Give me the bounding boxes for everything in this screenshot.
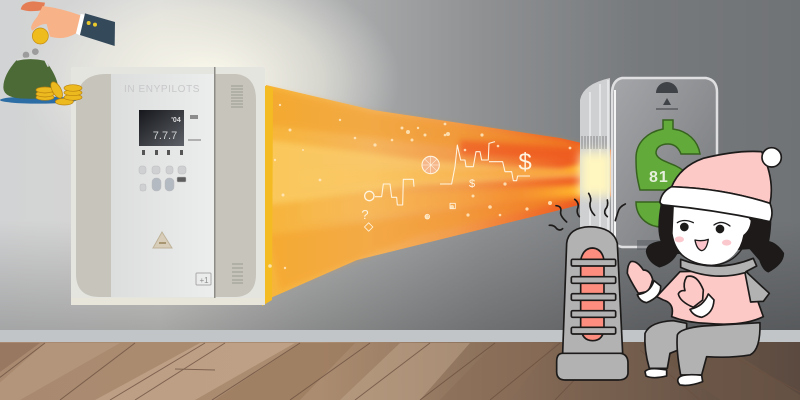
display screen bbox=[139, 110, 184, 146]
face bbox=[673, 203, 751, 265]
small indicators bbox=[142, 115, 201, 155]
falling coin bbox=[32, 28, 48, 44]
heat squiggles bbox=[549, 193, 625, 230]
sweater bbox=[657, 270, 763, 324]
green dollar sign bbox=[636, 120, 700, 227]
hand dropping coin with wallet bbox=[0, 1, 115, 105]
heat beam bbox=[262, 85, 612, 306]
left cuff bbox=[637, 281, 661, 303]
right cuff bbox=[690, 294, 714, 317]
beam dollar signs and question mark: $ bbox=[469, 178, 475, 190]
radiator emblem bbox=[656, 82, 678, 110]
beam dollar signs and question mark bbox=[361, 149, 532, 222]
beam dollar signs and question mark: ? bbox=[361, 207, 369, 222]
heat particles bbox=[268, 104, 596, 269]
beam dollar signs and question mark: $ bbox=[518, 149, 532, 176]
baseboard bbox=[0, 330, 800, 343]
winter hat bbox=[660, 148, 781, 222]
display screen: 7.7.7 bbox=[153, 130, 177, 142]
green dollar sign: 81 bbox=[649, 169, 669, 186]
chin line bbox=[677, 247, 743, 265]
hat crown bbox=[672, 151, 771, 203]
hand and sleeve bbox=[21, 1, 115, 46]
hat pom-pom bbox=[762, 148, 781, 167]
cartoon girl and space heater bbox=[549, 193, 783, 385]
scarf bbox=[681, 258, 769, 302]
right mitten bbox=[678, 276, 703, 307]
space heater bbox=[557, 227, 628, 380]
girl hair bbox=[647, 203, 783, 272]
front leg bbox=[677, 323, 760, 375]
hat band bbox=[660, 187, 772, 222]
control buttons bbox=[139, 166, 186, 191]
gold coin stacks bbox=[36, 80, 82, 105]
brand name: IN ENYPILOTS bbox=[124, 84, 200, 95]
eyebrows bbox=[677, 220, 730, 226]
left mitten bbox=[627, 261, 653, 293]
green purse bbox=[0, 48, 77, 104]
girl shoes bbox=[645, 369, 667, 378]
wall thermostat heater bbox=[71, 67, 265, 305]
vents bbox=[231, 86, 243, 283]
small label box: +1 bbox=[199, 276, 209, 285]
radiator with dollar sign bbox=[580, 78, 717, 250]
back leg bbox=[645, 321, 687, 368]
warning triangle bbox=[153, 232, 172, 248]
display screen: '04 bbox=[171, 117, 181, 124]
mouth bbox=[695, 239, 708, 251]
eyes and cheeks bbox=[675, 223, 731, 246]
data skyline bbox=[364, 142, 530, 231]
wooden floor bbox=[0, 342, 800, 400]
small label box bbox=[196, 273, 211, 285]
